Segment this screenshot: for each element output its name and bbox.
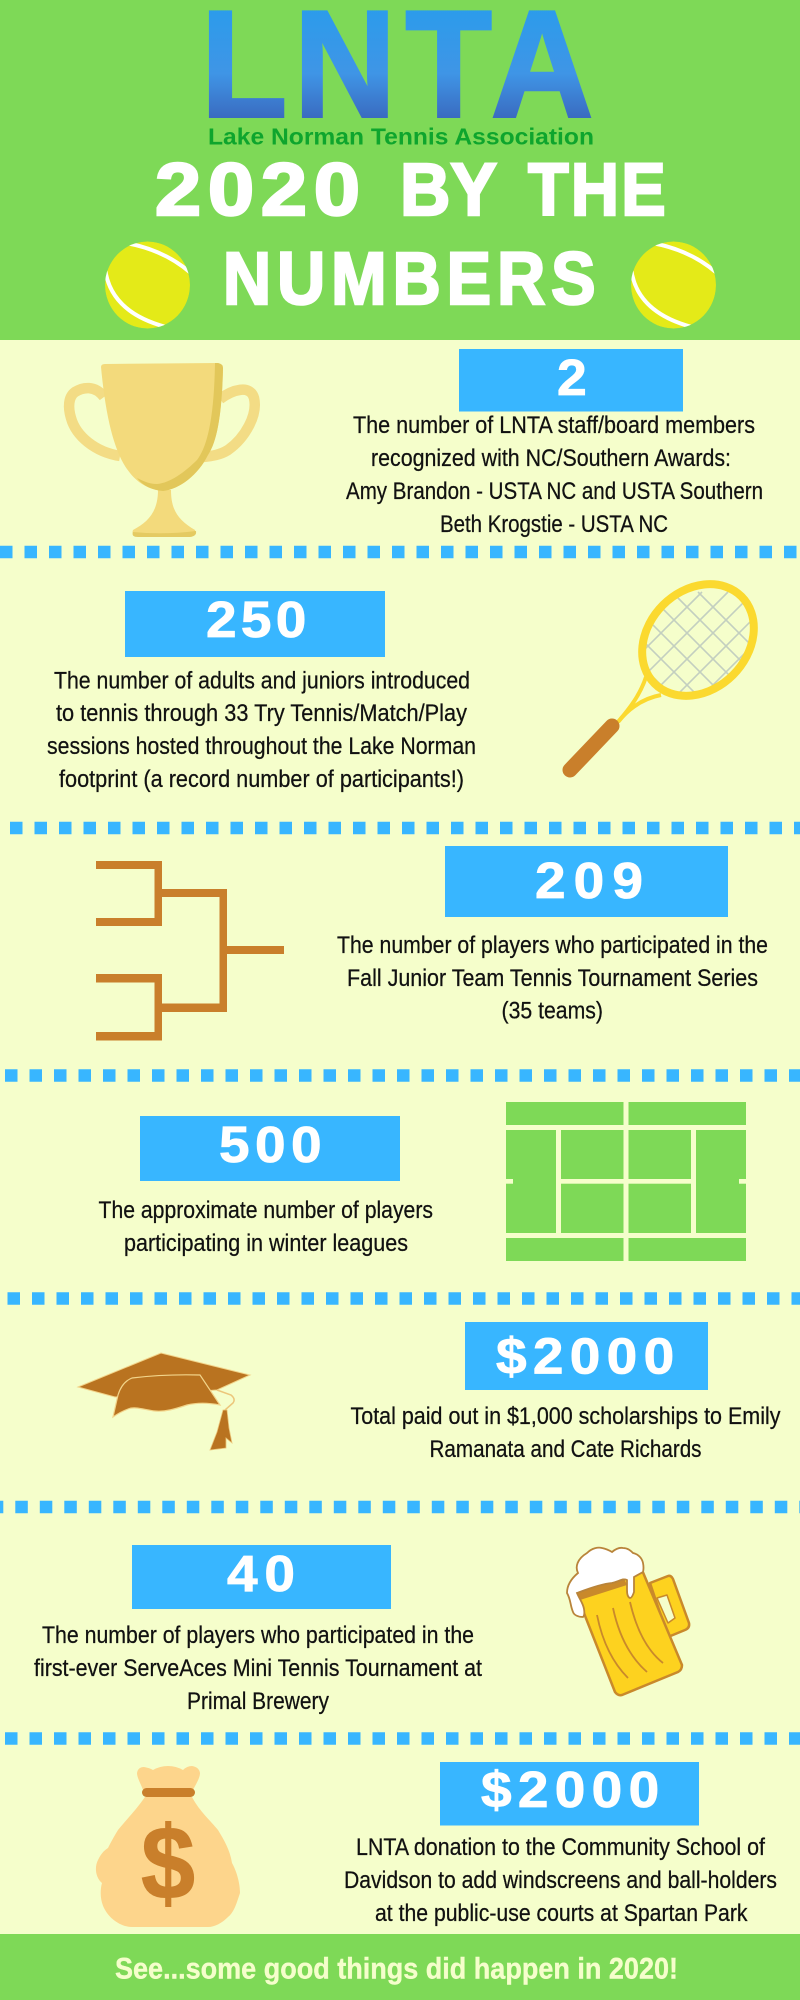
number box: 2: 2 <box>557 350 587 407</box>
panel: donation <box>96 1762 777 1927</box>
footer banner: See...some good things did happen in 2020! <box>115 1952 678 1986</box>
panel: scholarships <box>78 1322 780 1463</box>
text: try tennis description: sessions hosted throughout the Lake Norman <box>47 733 476 760</box>
icon: tennis ball left <box>105 242 192 328</box>
text: awards description: Beth Krogstie - USTA NC <box>440 511 668 538</box>
text: mini tennis description: Primal Brewery <box>187 1688 329 1715</box>
text: mini tennis description: The number of players who participated in the <box>42 1622 474 1649</box>
footer banner <box>0 1934 800 2000</box>
icon: racket <box>562 580 758 778</box>
number box: 40 <box>132 1545 391 1609</box>
text: mini tennis description: first-ever ServeAces Mini Tennis Tournament at <box>34 1655 482 1682</box>
icon: money bag: $ <box>141 1806 195 1922</box>
icon: tennis ball right <box>631 242 718 328</box>
header banner <box>0 0 800 340</box>
title line 1: 2020 <box>155 148 360 231</box>
text: try tennis description: footprint (a record number of participants!) <box>59 766 464 793</box>
text: scholarships description: Ramanata and Cate Richards <box>430 1436 702 1463</box>
text: donation description <box>344 1834 777 1927</box>
text: winter leagues description: The approximate number of players <box>98 1197 433 1224</box>
number box: $2000 donation <box>440 1762 699 1826</box>
text: scholarships description <box>350 1403 780 1463</box>
number box: 2 <box>459 349 683 412</box>
text: awards description: recognized with NC/Southern Awards: <box>371 445 731 472</box>
icon: graduation cap <box>78 1353 250 1450</box>
panel: try tennis <box>48 580 758 792</box>
text: donation description: at the public-use courts at Spartan Park <box>375 1900 748 1927</box>
panel: mini tennis <box>34 1545 689 1715</box>
text: awards description <box>346 412 763 538</box>
number box: 40: 40 <box>227 1546 295 1603</box>
title line 1: BY <box>400 148 497 231</box>
number box: $2000 scholarships: $2000 <box>496 1328 674 1385</box>
icon: tennis court <box>506 1102 746 1261</box>
text: try tennis description: to tennis through 33 Try Tennis/Match/Play <box>56 700 467 727</box>
icon: trophy <box>69 363 255 537</box>
number box: 500: 500 <box>219 1117 322 1174</box>
logo subtitle: Lake Norman Tennis Association <box>208 124 594 150</box>
text: tournament description <box>337 932 768 1024</box>
text: mini tennis description <box>34 1622 482 1715</box>
text: awards description: The number of LNTA staff/board members <box>353 412 755 439</box>
text: try tennis description <box>47 668 476 793</box>
text: tournament description: Fall Junior Team Tennis Tournament Series <box>347 965 758 992</box>
panel: winter leagues <box>98 1102 746 1261</box>
number box: 250: 250 <box>206 592 306 649</box>
number box: 250 <box>125 591 385 657</box>
title line 1 <box>155 148 666 231</box>
dashed dividers <box>0 552 800 1738</box>
title line 1: THE <box>528 148 666 231</box>
icon: tournament bracket <box>96 861 284 1040</box>
panel: staff awards <box>69 349 763 538</box>
text: winter leagues description <box>98 1197 433 1257</box>
number box: 500 <box>140 1116 400 1181</box>
panel: junior tournament <box>96 846 768 1040</box>
number box: 209 <box>445 846 728 917</box>
text: tournament description: (35 teams) <box>502 998 603 1024</box>
text: try tennis description: The number of adults and juniors introduced <box>54 668 470 694</box>
number box: $2000 scholarships <box>465 1322 708 1390</box>
text: winter leagues description: participating in winter leagues <box>124 1230 408 1257</box>
title line 2: NUMBERS <box>223 237 596 320</box>
icon: beer mug <box>567 1548 689 1695</box>
number box: $2000 donation: $2000 <box>481 1762 659 1819</box>
number box: 209: 209 <box>535 853 643 910</box>
icon: money bag <box>96 1766 240 1927</box>
